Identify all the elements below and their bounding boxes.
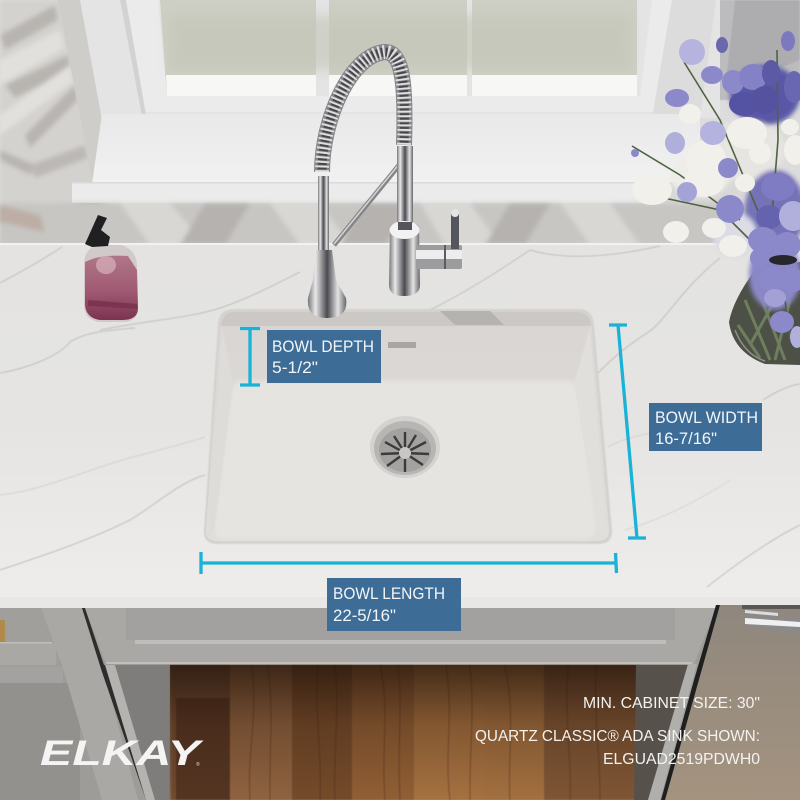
white blooms — [632, 104, 800, 257]
faucet handle — [416, 245, 462, 269]
vase — [729, 262, 800, 365]
arm — [334, 164, 400, 245]
left cabinet door — [0, 608, 150, 800]
Elkay logo: ELKAY — [40, 734, 204, 773]
sink left wall — [208, 327, 233, 537]
model number: ELGUAD2519PDWH0 — [603, 751, 760, 768]
right stile and cabinet — [648, 605, 800, 800]
marble wall right — [715, 0, 800, 100]
Elkay logo: ® — [196, 761, 200, 768]
purple blooms — [631, 31, 800, 348]
window sill — [72, 114, 750, 203]
label box: width — [649, 403, 762, 451]
label text: depth: BOWL DEPTH — [272, 338, 374, 356]
label text: length: 22-5/16" — [333, 607, 396, 625]
sink series: QUARTZ CLASSIC® ADA SINK SHOWN: — [475, 728, 760, 745]
counter back edge — [0, 243, 800, 245]
dimension: bowl length — [201, 552, 616, 631]
toe-space opening side — [115, 665, 175, 800]
sink floor — [214, 381, 596, 539]
label text: length: BOWL LENGTH — [333, 585, 445, 603]
drain — [370, 416, 440, 478]
pull-down hose — [318, 176, 329, 258]
cyan bracket: width — [609, 325, 646, 538]
label text: depth: 5-1/2" — [272, 359, 318, 377]
cyan bracket: length — [201, 552, 616, 574]
window — [58, 0, 720, 180]
left stile of opening — [105, 665, 155, 800]
ADA apron panel — [85, 608, 716, 664]
sink logo plate — [388, 342, 416, 348]
spring hose — [322, 52, 404, 172]
label text: width: BOWL WIDTH — [655, 409, 758, 427]
cabinet base — [0, 605, 800, 800]
label text: width: 16-7/16" — [655, 430, 717, 448]
label box: length — [327, 578, 461, 631]
label box: depth — [267, 330, 381, 383]
window panes — [160, 0, 637, 96]
faucet — [308, 52, 462, 318]
spray base — [308, 250, 346, 318]
faucet base — [389, 222, 420, 296]
sink right wall — [574, 327, 607, 537]
right opening side — [634, 665, 688, 800]
marble backsplash — [0, 203, 800, 245]
dimension: bowl width — [609, 325, 762, 538]
countertop — [0, 244, 800, 602]
wood floor — [170, 665, 640, 800]
sink — [204, 309, 612, 544]
dark flower centre — [769, 255, 797, 265]
faucet riser — [397, 146, 413, 228]
counter front edge — [0, 597, 800, 608]
dimension: bowl depth — [240, 327, 381, 385]
sink top ledge — [221, 312, 591, 326]
min cabinet size: MIN. CABINET SIZE: 30" — [583, 695, 760, 712]
sink rim shadow — [204, 309, 612, 544]
marble veins — [0, 246, 800, 587]
cyan bracket: depth — [240, 327, 260, 385]
cabinet size and model note — [475, 695, 760, 768]
sink rear wall — [206, 312, 609, 541]
soap bottle — [84, 215, 138, 322]
window frame — [80, 0, 720, 118]
marble chevron wall left — [0, 0, 110, 245]
foliage underlay — [670, 65, 800, 310]
flower stems — [632, 50, 790, 340]
flowers — [631, 31, 800, 348]
